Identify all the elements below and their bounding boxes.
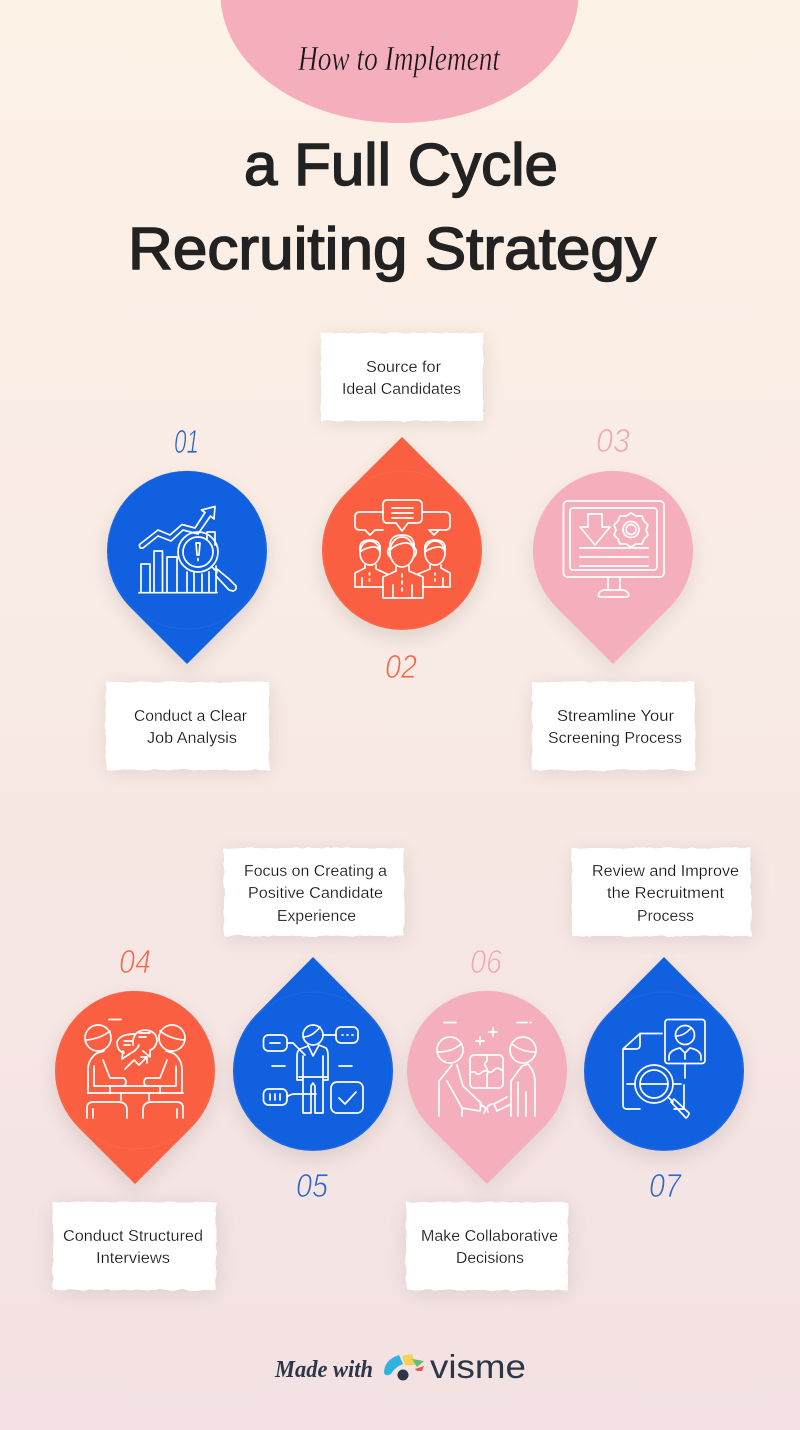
step 02: [321, 333, 484, 685]
step 01 label: [106, 682, 270, 773]
title: Recruiting Strategy: [128, 216, 657, 282]
step 07: [572, 848, 753, 1204]
step 06: [406, 943, 569, 1293]
step 07 label: the Recruitment: [607, 885, 725, 902]
step 05 drop: [233, 957, 393, 1158]
step 03 drop: [533, 471, 693, 672]
step 05: [224, 848, 405, 1204]
step 03 label: Streamline Your: [557, 708, 674, 725]
icon: two people at a table: [85, 1020, 185, 1118]
step 05 label: [224, 848, 405, 939]
icon: handshake with puzzle: [437, 1022, 536, 1116]
step 03: [532, 422, 696, 773]
step 04 number: 04: [119, 943, 151, 980]
icon: visme logo: [384, 1354, 424, 1380]
icon: team with speech bubbles: [355, 500, 450, 598]
step 04 drop: [55, 991, 215, 1192]
step 07 label: Review and Improve: [592, 863, 739, 880]
made with text: Made with: [274, 1357, 373, 1383]
step 06 label: [406, 1202, 569, 1293]
step 05 number: 05: [296, 1167, 329, 1204]
icon: document with magnifier and profile: [623, 1020, 705, 1118]
step 02 label: Ideal Candidates: [342, 381, 461, 398]
icon: person with option boxes: [264, 1025, 363, 1113]
step 06 drop: [407, 991, 567, 1192]
step 02 drop: [322, 437, 482, 638]
header ellipse: [220, 0, 578, 123]
step 01 number: 01: [174, 423, 199, 460]
step 07 drop: [584, 957, 744, 1158]
step 07 label: Process: [637, 908, 694, 925]
step 01 label: Job Analysis: [147, 730, 237, 747]
subtitle: How to Implement: [297, 39, 501, 78]
step 02 number: 02: [385, 648, 417, 685]
step 07 label: [572, 848, 753, 939]
step 03 label: [532, 682, 696, 773]
step 05 label: Positive Candidate: [248, 885, 383, 902]
step 01: [106, 423, 270, 773]
title: a Full Cycle: [244, 132, 558, 198]
title: [128, 132, 657, 282]
step 06 label: Decisions: [456, 1250, 524, 1267]
step 06 label: Make Collaborative: [421, 1228, 558, 1245]
visme wordmark: visme: [430, 1348, 526, 1385]
icon: chart with magnifier: [139, 506, 236, 593]
step 05 label: Focus on Creating a: [244, 863, 387, 880]
step 01 label: Conduct a Clear: [134, 708, 247, 725]
step 03 label: Screening Process: [548, 730, 682, 747]
step 01 drop: [107, 471, 267, 672]
step 04 label: [53, 1202, 217, 1293]
step 04 label: Conduct Structured: [63, 1228, 203, 1245]
step 02 label: [321, 333, 484, 424]
step 04 label: Interviews: [96, 1250, 170, 1267]
step 02 label: Source for: [366, 359, 441, 376]
step 06 number: 06: [470, 943, 503, 980]
step 05 label: Experience: [277, 908, 356, 925]
icon: monitor with arrow and gear: [564, 501, 664, 597]
footer: made with visme: [274, 1348, 526, 1385]
step 04: [53, 943, 217, 1293]
step 03 number: 03: [596, 422, 631, 459]
step 07 number: 07: [649, 1167, 682, 1204]
